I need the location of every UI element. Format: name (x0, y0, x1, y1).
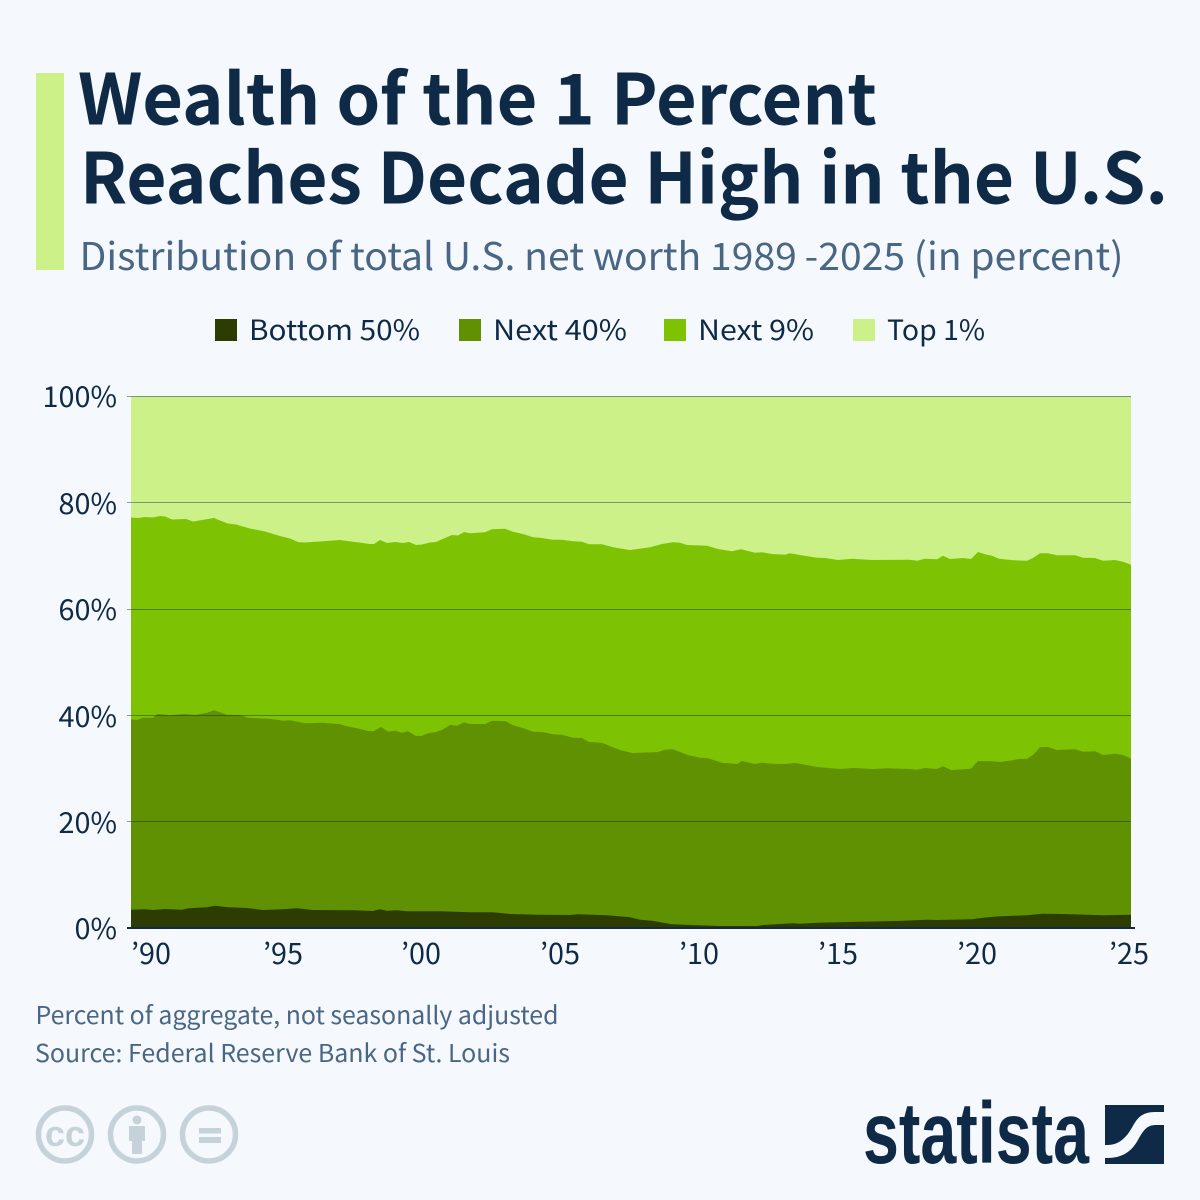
y axis labels: 100% (43, 375, 117, 416)
y axis labels: 0% (74, 907, 117, 948)
y axis labels: 60% (58, 588, 117, 629)
area: bottom 50% (131, 906, 1131, 928)
area: next 40% (131, 710, 1131, 928)
legend item: top 1%: Top 1% (887, 309, 985, 349)
x axis line (127, 927, 1135, 929)
legend (215, 309, 985, 349)
footnote and source: Source: Federal Reserve Bank of St. Louis (35, 1035, 510, 1070)
x axis labels (131, 932, 1149, 973)
x axis labels: ’05 (540, 932, 580, 973)
icon: creative commons: cc (45, 1113, 85, 1154)
footnote and source (35, 997, 558, 1070)
x axis labels: ’00 (401, 932, 441, 973)
statista icon (1105, 1105, 1164, 1164)
y axis labels (43, 375, 117, 948)
area: next 9% (131, 516, 1131, 928)
x axis labels: ’20 (957, 932, 997, 973)
area: top 1% (131, 396, 1131, 928)
title: Reaches Decade High in the U.S. (80, 124, 1168, 224)
icon: attribution (110, 1108, 164, 1161)
subtitle: Distribution of total U.S. net worth 1989 -2025 (in percent) (80, 226, 1124, 281)
x axis labels: ’90 (131, 932, 171, 973)
title (78, 44, 1168, 224)
stacked area chart (131, 396, 1131, 928)
legend item: next 9%: Next 9% (698, 309, 814, 349)
x axis labels: ’10 (679, 932, 719, 973)
y axis labels: 80% (58, 482, 117, 523)
x axis labels: ’95 (263, 932, 303, 973)
y axis labels: 40% (58, 695, 117, 736)
icon: no derivatives (182, 1108, 236, 1161)
icon: creative commons (38, 1108, 92, 1161)
accent bar (36, 73, 64, 270)
legend item: next 40%: Next 40% (493, 309, 627, 349)
footnote and source: Percent of aggregate, not seasonally adjusted (36, 997, 558, 1032)
title: Wealth of the 1 Percent (78, 44, 877, 146)
legend item: bottom 50%: Bottom 50% (249, 309, 420, 349)
statista wordmark: statista (863, 1085, 1089, 1182)
y axis labels: 20% (58, 801, 117, 842)
x axis labels: ’15 (818, 932, 858, 973)
x axis labels: ’25 (1109, 932, 1149, 973)
